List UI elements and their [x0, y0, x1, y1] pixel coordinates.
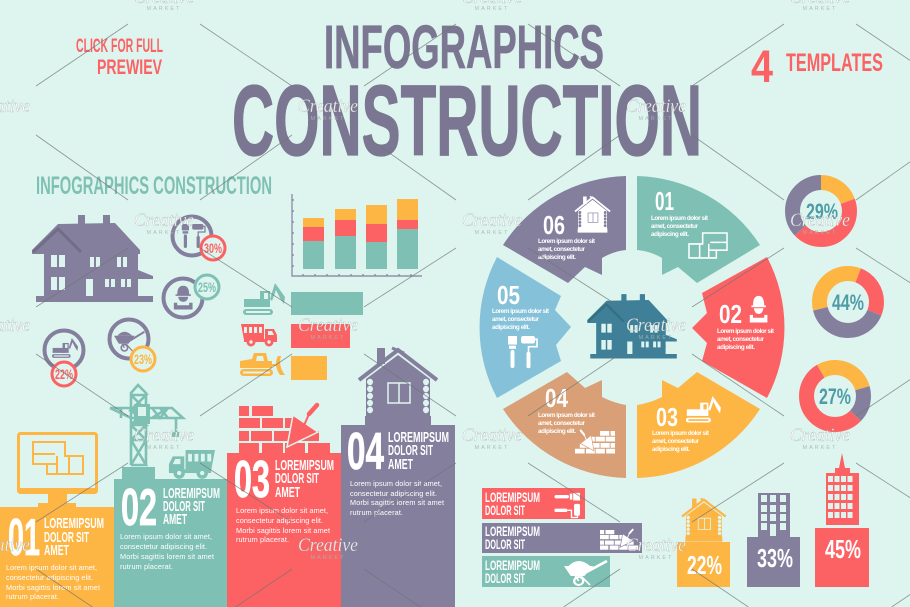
step 01 column: DOLOR SIT: [44, 529, 89, 546]
wheel segment 05: adipiscing elit.: [492, 324, 530, 331]
watermark logos: Creative: [134, 210, 194, 231]
wheel segment 04: [503, 372, 626, 478]
wheel segment 05: 05: [497, 280, 520, 310]
vehicle bars: [240, 283, 363, 380]
step 01 column: Lorem ipsum dolor sit amet,: [6, 563, 97, 572]
icon: centre house: [587, 294, 677, 358]
icon: worker circle 25%: [164, 275, 219, 318]
templates count: 4: [751, 41, 773, 92]
wheel segment 04: adipiscing elit.: [538, 428, 576, 435]
icon: tools circle 30%: [172, 216, 225, 260]
step 01 column: AMET: [44, 542, 69, 559]
step 01 column: consectetur adipiscing elit.: [6, 573, 93, 582]
watermark logos: MARKET: [147, 445, 181, 451]
step 04 column: [341, 423, 455, 607]
wheel segment 06: Lorem ipsum dolor sit: [538, 238, 596, 245]
watermark logos: MARKET: [311, 335, 345, 341]
wheel segment 05: [480, 257, 571, 398]
wheel segment 02: 02: [719, 299, 742, 329]
wheel segment 04: 04: [545, 383, 568, 413]
wheel segment 05: amet, consectetur: [492, 316, 540, 323]
bar chart: [292, 194, 422, 276]
donut 44%: [820, 274, 876, 330]
donut 29%: 29%: [806, 199, 838, 224]
watermark logos: MARKET: [147, 230, 181, 236]
watermark logos: MARKET: [475, 445, 509, 451]
step 02 column: Morbi sagittis lorem sit amet: [120, 552, 214, 561]
label bar red: [482, 488, 585, 519]
building 33%: 33%: [757, 543, 793, 573]
step 04 column: Morbi sagittis lorem sit amet: [350, 498, 444, 507]
section heading: INFOGRAPHICS CONSTRUCTION: [36, 172, 272, 200]
link: click for full preview: PREWIEV: [97, 56, 162, 79]
step 01 column: rutrum placerat.: [6, 592, 59, 601]
watermark logos: Creative: [134, 425, 194, 446]
label bar purple: DOLOR SIT: [485, 536, 525, 552]
title: INFOGRAPHICS: [324, 13, 604, 81]
title: [232, 13, 702, 177]
wheel segment 01: adipiscing elit.: [651, 231, 689, 238]
step 03 bricks icon: [239, 405, 330, 453]
watermark logos: Creative: [298, 535, 358, 556]
step 02 column: AMET: [163, 511, 187, 528]
icon: wheelbarrow circle 23%: 23%: [134, 351, 152, 367]
step 04 cabin icon: [359, 348, 437, 425]
step 03 column: LOREMIPSUM: [275, 457, 334, 474]
step 02 column: LOREMIPSUM: [163, 485, 220, 502]
step 04 column: AMET: [388, 456, 413, 473]
step 04 column: consectetur adipiscing elit.: [350, 489, 437, 498]
step 04 column: 04: [347, 423, 384, 481]
step 03 column: DOLOR SIT: [275, 470, 319, 487]
icon: excavator circle 22%: 22%: [55, 366, 73, 382]
wheel segment 04: amet, consectetur: [538, 420, 586, 427]
watermark logos: MARKET: [475, 6, 509, 12]
step 04 column: rutrum placerat.: [350, 508, 403, 517]
watermark logos: MARKET: [803, 6, 837, 12]
watermark logos: Creative: [790, 210, 850, 231]
wheel segment 03: Lorem ipsum dolor sit: [652, 430, 710, 437]
step 01 column: LOREMIPSUM: [44, 515, 104, 532]
donut 27%: [806, 368, 864, 424]
watermark logos: Creative: [790, 425, 850, 446]
step 03 column: AMET: [275, 484, 300, 501]
wheel segment 03: adipiscing elit.: [652, 446, 690, 453]
icon: excavator circle 22%: [44, 330, 84, 386]
step 04 column: Lorem ipsum dolor sit amet,: [350, 479, 442, 488]
watermark logos: MARKET: [311, 555, 345, 561]
step 02 column: [114, 479, 227, 607]
building 45%: [815, 453, 869, 587]
wheel segment 03: 03: [656, 402, 678, 432]
wheel segment 02: adipiscing elit.: [717, 344, 755, 351]
watermark logos: MARKET: [639, 335, 673, 341]
watermark logos: Creative: [626, 315, 686, 336]
building 45%: 45%: [825, 534, 861, 564]
label bar purple: LOREMIPSUM: [485, 523, 540, 539]
wheel segment 03: [637, 372, 760, 478]
step 03 column: rutrum placerat.: [236, 535, 289, 544]
step 03 column: [227, 451, 341, 607]
watermark logos: Creative: [626, 535, 686, 556]
step 01 monitor icon: [18, 434, 96, 507]
step 03 column: Lorem ipsum dolor sit amet,: [236, 506, 328, 515]
watermark logos: Creative: [462, 210, 522, 231]
watermark logos: Creative: [298, 315, 358, 336]
wheel segment 01: [637, 176, 760, 283]
watermark logos: MARKET: [803, 230, 837, 236]
watermark logos: Creative: [298, 96, 358, 117]
wheel segment 01: amet, consectetur: [651, 223, 699, 230]
label bar red: LOREMIPSUM: [485, 489, 540, 505]
wheel segment 02: Lorem ipsum dolor sit: [717, 328, 775, 335]
icon: wheelbarrow circle 23%: [110, 320, 155, 371]
wheel segment 05: Lorem ipsum dolor sit: [492, 308, 550, 315]
wheel segment 02: amet, consectetur: [717, 336, 765, 343]
step 04 column: LOREMIPSUM: [388, 429, 449, 446]
step 02 crane icon: [110, 385, 215, 479]
donut 27%: 27%: [819, 384, 851, 409]
step 02 column: DOLOR SIT: [163, 498, 205, 515]
wheel segment 06: adipiscing elit.: [538, 254, 576, 261]
step 02 column: consectetur adipiscing elit.: [120, 542, 207, 551]
icon: large house: [32, 215, 153, 302]
wheel segment 06: 06: [543, 210, 565, 240]
building 22%: [677, 499, 730, 587]
label bar teal: [482, 556, 610, 587]
label bar red: DOLOR SIT: [485, 502, 525, 518]
step 01 column: [0, 507, 114, 607]
watermark logos: MARKET: [639, 116, 673, 122]
templates count: [751, 41, 883, 92]
building 33%: [747, 493, 800, 587]
watermark logos: Creative: [626, 96, 686, 117]
step 01 column: 01: [8, 509, 40, 567]
donut 29%: [792, 182, 850, 240]
wheel segment 01: 01: [655, 186, 674, 216]
watermark logos: MARKET: [311, 116, 345, 122]
wheel segment 06: [503, 176, 626, 283]
step 03 column: 03: [234, 451, 270, 509]
wheel segment 01: Lorem ipsum dolor sit: [651, 215, 709, 222]
link: click for full preview: [76, 36, 163, 79]
watermark logos: Creative: [462, 425, 522, 446]
step 02 column: Lorem ipsum dolor sit amet,: [120, 532, 212, 541]
wheel segment 03: amet, consectetur: [652, 438, 700, 445]
step 02 column: 02: [121, 479, 157, 537]
donut 44%: 44%: [832, 290, 864, 315]
watermark logos: MARKET: [803, 445, 837, 451]
icon: worker circle 25%: 25%: [198, 279, 216, 295]
step 03 column: consectetur adipiscing elit.: [236, 516, 323, 525]
icon: tools circle 30%: 30%: [204, 240, 222, 256]
step 04 column: DOLOR SIT: [388, 442, 433, 459]
label bar teal: DOLOR SIT: [485, 570, 525, 586]
wheel segment 02: [692, 257, 784, 398]
wheel segment 04: Lorem ipsum dolor sit: [538, 412, 596, 419]
step 03 column: Morbi sagittis lorem sit amet: [236, 526, 330, 535]
building 22%: 22%: [687, 550, 722, 580]
link: click for full preview: CLICK FOR FULL: [76, 36, 163, 57]
step 01 column: Morbi sagittis lorem sit amet: [6, 583, 100, 592]
watermark logos: MARKET: [639, 555, 673, 561]
wheel segment 06: amet, consectetur: [538, 246, 586, 253]
label bar purple: [482, 523, 642, 553]
watermark logos: MARKET: [147, 6, 181, 12]
label bar teal: LOREMIPSUM: [485, 557, 540, 573]
step 02 column: rutrum placerat.: [120, 562, 173, 571]
watermark logos: MARKET: [475, 230, 509, 236]
